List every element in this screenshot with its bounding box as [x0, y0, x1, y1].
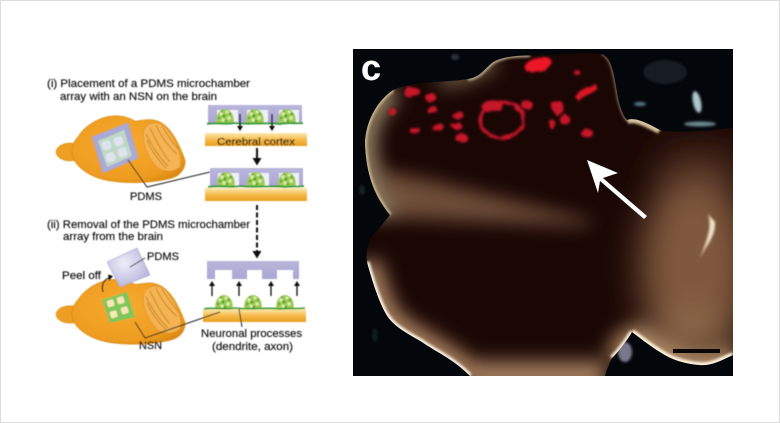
brain body: [353, 49, 750, 376]
highlight: right lobe: [700, 214, 715, 258]
label: neuronal processes: (dendrite, axon): [212, 341, 293, 353]
illustration: brain with PDMS sheet: [56, 116, 185, 183]
wide rim glow: [365, 61, 733, 376]
panel: brain photograph: [353, 47, 750, 376]
heading: step i: [47, 78, 251, 103]
heading: step ii: array from the brain: [63, 231, 163, 243]
heading: step i: array with an NSN on the brain: [60, 91, 217, 103]
arrow: down: [252, 148, 262, 166]
label: PDMS peeled: PDMS: [147, 251, 179, 263]
narrow rim light: [365, 54, 733, 376]
label: peel off: Peel off: [62, 270, 101, 282]
label: neuronal processes: [201, 328, 302, 353]
fold band glow: [376, 170, 590, 226]
arrow: white: [587, 160, 647, 219]
diagram: chamber on cortex: [205, 168, 307, 201]
label: PDMS: PDMS: [130, 191, 162, 203]
heading: step ii: (ii) Removal of the PDMS microchamber: [47, 219, 251, 231]
fluorescent red spots: [388, 55, 597, 142]
arrow: dashed down: [252, 205, 262, 258]
arrows: upward: [209, 281, 300, 296]
callout line: neuronal processes: [239, 309, 242, 327]
arrows: placement: [237, 114, 275, 131]
heading: step ii: [47, 219, 251, 243]
callout line: PDMS: [128, 160, 210, 187]
diagram: neurons on cortex: [203, 295, 306, 322]
arrow: peel off: [102, 274, 113, 292]
callout line: peeled PDMS: [130, 258, 145, 267]
label: c: c: [361, 47, 381, 88]
panel: PDMS microchamber schematic: [47, 78, 307, 353]
diagram: chamber above cortex: [205, 105, 307, 146]
label: neuronal processes: Neuronal processes: [201, 328, 302, 340]
diagram: removed chamber: [207, 261, 299, 279]
scale bar: [673, 349, 720, 353]
icon: peeled PDMS sheet: [107, 248, 150, 287]
label: NSN: NSN: [139, 340, 162, 352]
callout line: NSN: [135, 312, 220, 338]
label: cerebral cortex: Cerebral cortex: [217, 137, 295, 148]
heading: step i: (i) Placement of a PDMS microchamber: [47, 78, 251, 90]
right lobe glow: [640, 145, 750, 360]
background specks: [359, 54, 716, 362]
illustration: brain with NSN grid: [56, 279, 185, 344]
